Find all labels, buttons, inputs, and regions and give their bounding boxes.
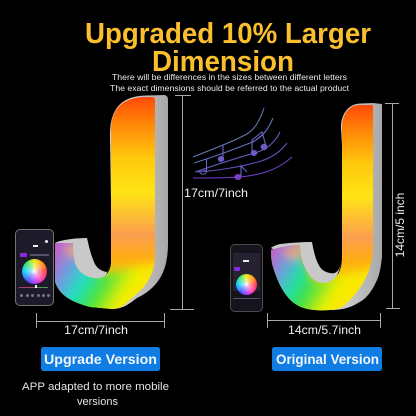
original version badge: Original Version	[276, 351, 379, 367]
app compatibility note: APP adapted to more mobile	[22, 381, 169, 393]
width dimension: original	[267, 313, 381, 328]
width dimension: upgrade	[36, 313, 165, 328]
large letter J	[55, 95, 168, 309]
upgrade version badge	[41, 347, 160, 371]
height dimension: original	[385, 103, 400, 308]
disclaimer text: There will be differences in the sizes between different letters	[112, 73, 347, 82]
width label: upgrade: 17cm/7inch	[64, 323, 128, 337]
colour wheel	[22, 259, 46, 284]
disclaimer text: The exact dimensions should be referred to the actual product	[110, 84, 350, 93]
title: Dimension	[152, 46, 294, 78]
colour wheel	[236, 274, 257, 295]
title: Upgraded 10% Larger	[85, 18, 371, 50]
phone: original app	[230, 244, 263, 312]
original version badge	[272, 347, 382, 371]
height label: upgrade: 17cm/7inch	[184, 186, 248, 200]
height label: original: 14cm/5 inch	[393, 193, 407, 257]
small letter J	[271, 103, 382, 310]
title	[85, 18, 371, 78]
phone: upgrade app	[15, 229, 54, 306]
height dimension: upgrade	[170, 95, 194, 310]
app compatibility note	[22, 381, 169, 408]
disclaimer text	[110, 73, 350, 93]
upgrade version badge: Upgrade Version	[44, 351, 157, 367]
width label: original: 14cm/5.7inch	[288, 323, 361, 337]
app compatibility note: versions	[77, 396, 118, 408]
music notes	[193, 108, 292, 180]
